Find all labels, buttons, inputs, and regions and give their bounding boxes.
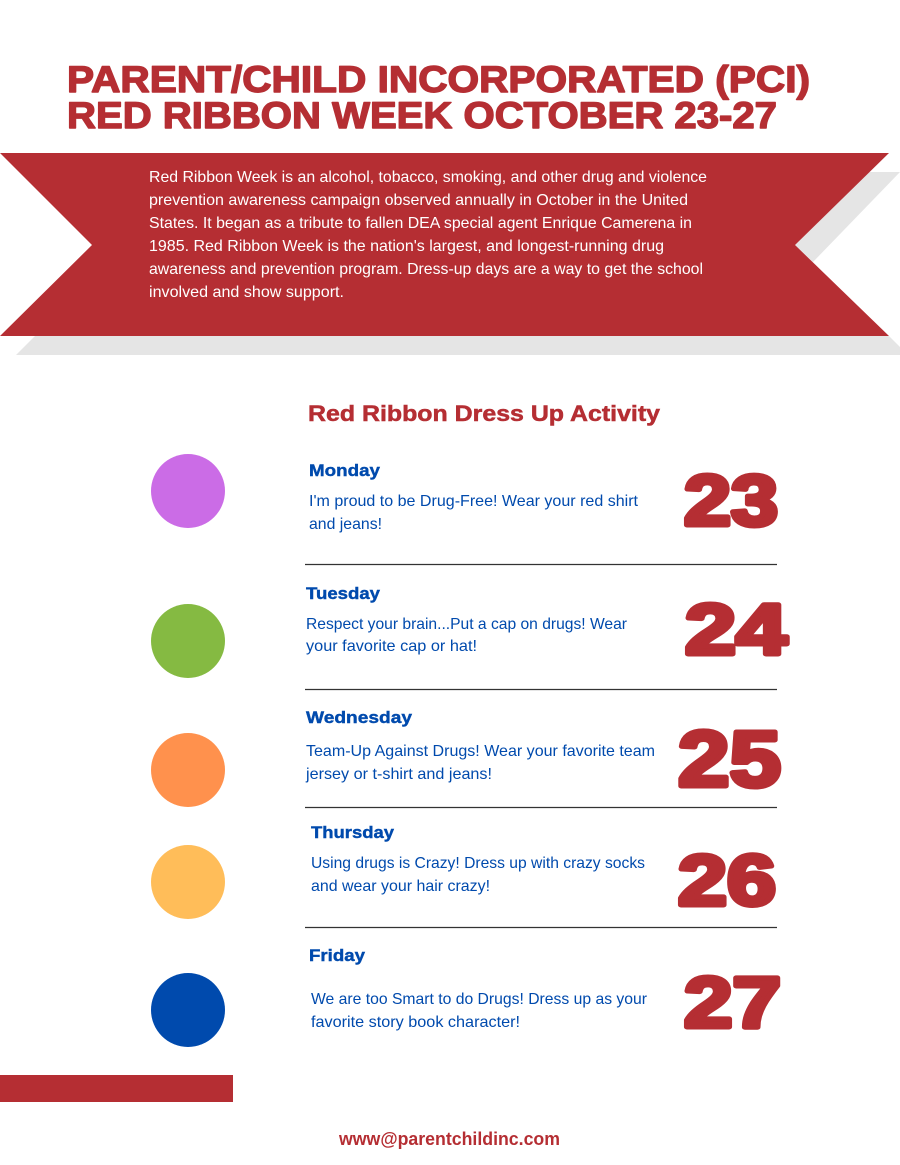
activity: Wednesday: jersey or t-shirt and jeans!: [305, 766, 492, 783]
intro text: awareness and prevention program. Dress-up days are a way to get the school: [149, 261, 703, 278]
activity: Tuesday: Respect your brain...Put a cap on drugs! Wear: [306, 616, 628, 633]
icon: purple circle: [151, 454, 225, 528]
date: 27: 27: [684, 964, 781, 1043]
icon: orange circle: [151, 733, 225, 807]
date: 24: 24: [685, 591, 788, 670]
intro text: Red Ribbon Week is an alcohol, tobacco, smoking, and other drug and violence: [149, 169, 707, 186]
activity: Wednesday: Wednesday: [306, 709, 413, 727]
title: [67, 59, 810, 136]
activity: Friday: [309, 947, 648, 1031]
footer: website: www@parentchildinc.com: [338, 1129, 560, 1149]
icon: green circle: [151, 604, 225, 678]
title: RED RIBBON WEEK OCTOBER 23-27: [67, 95, 777, 136]
icon: yellow circle: [151, 845, 225, 919]
activity: Monday: [309, 462, 639, 533]
panel: intro ribbon: [0, 153, 889, 336]
intro text: prevention awareness campaign observed annually in October in the United: [149, 192, 688, 209]
date: 23: 23: [684, 462, 778, 541]
activity: Thursday: Thursday: [311, 824, 395, 842]
footer bar: [0, 1075, 233, 1102]
icon: blue circle: [151, 973, 225, 1047]
activity: Thursday: [311, 824, 645, 895]
ribbon shadow: [16, 172, 900, 355]
heading: dress up activity: Red Ribbon Dress Up Activity: [308, 401, 661, 426]
activity: Friday: Friday: [309, 947, 366, 965]
activity: Thursday: Using drugs is Crazy! Dress up with crazy socks: [311, 855, 645, 872]
intro text: States. It began as a tribute to fallen DEA special agent Enrique Camerena in: [149, 215, 692, 232]
title: PARENT/CHILD INCORPORATED (PCI): [67, 59, 810, 100]
activity: Tuesday: Tuesday: [306, 585, 381, 603]
date: 25: 25: [678, 714, 781, 803]
activity: Monday: and jeans!: [309, 516, 382, 533]
activity: Friday: We are too Smart to do Drugs! Dress up as your: [311, 991, 648, 1008]
activity: Monday: Monday: [309, 462, 381, 480]
activity: Thursday: and wear your hair crazy!: [311, 878, 490, 895]
activity: Monday: I'm proud to be Drug-Free! Wear your red shirt: [309, 493, 639, 510]
date: 26: 26: [678, 842, 776, 921]
activity: Wednesday: [305, 709, 655, 783]
activity: Wednesday: Team-Up Against Drugs! Wear your favorite team: [306, 743, 655, 760]
intro text: involved and show support.: [149, 284, 344, 301]
activity: Tuesday: [306, 585, 628, 655]
activity: Tuesday: your favorite cap or hat!: [306, 638, 477, 655]
intro text: 1985. Red Ribbon Week is the nation's largest, and longest-running drug: [149, 238, 664, 255]
activity: Friday: favorite story book character!: [311, 1014, 520, 1031]
intro text: [149, 169, 707, 301]
